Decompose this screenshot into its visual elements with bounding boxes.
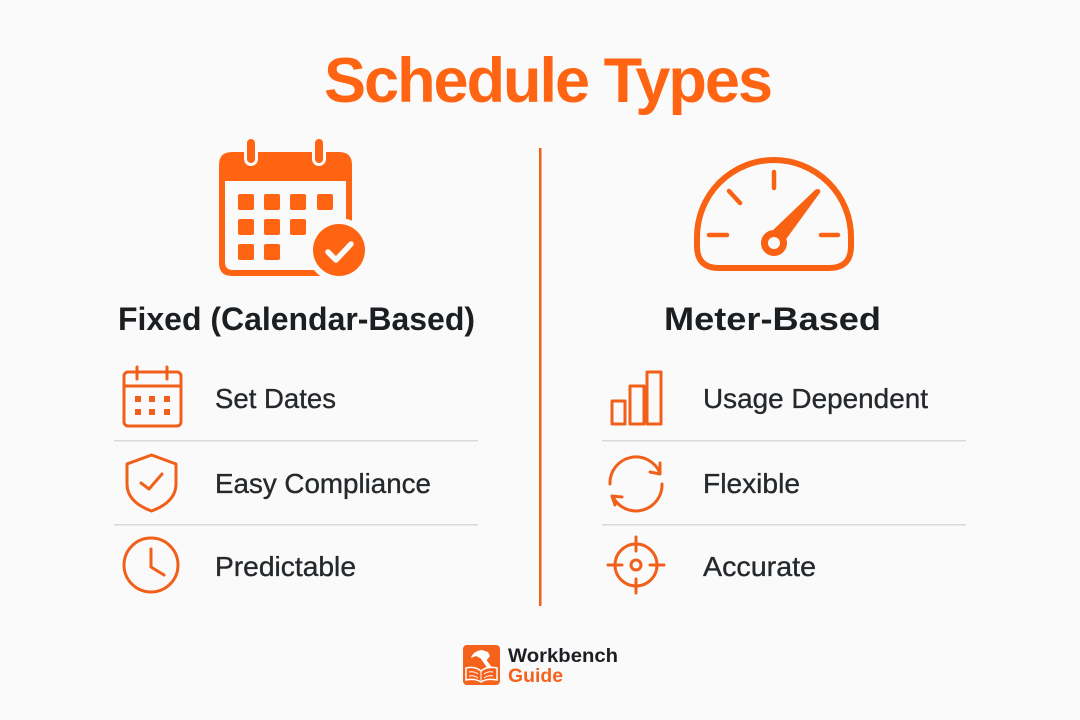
icon: hammer and book — [463, 645, 500, 685]
title: Schedule Types — [324, 46, 773, 116]
list item: easy compliance — [127, 455, 431, 511]
label: accurate: Accurate — [703, 551, 816, 582]
wordmark: workbench: Workbench — [508, 646, 618, 667]
wordmark: guide: Guide — [508, 666, 563, 687]
icon: large calendar with check — [219, 136, 371, 282]
list item: flexible — [610, 457, 800, 511]
icon: small calendar — [124, 367, 181, 426]
center divider — [539, 148, 542, 606]
heading: meter-based: Meter-Based — [664, 301, 881, 337]
label: set dates: Set Dates — [215, 383, 336, 414]
panel: fixed calendar-based — [118, 136, 475, 592]
list item: set dates — [124, 367, 336, 426]
icon: bars — [612, 372, 661, 424]
icon: refresh arrows — [610, 457, 662, 511]
panel: meter-based — [608, 160, 928, 593]
icon: shield check — [127, 455, 176, 511]
label: flexible: Flexible — [703, 468, 800, 499]
icon: clock — [124, 538, 178, 592]
heading: fixed: Fixed (Calendar-Based) — [118, 301, 475, 337]
list item: predictable — [124, 538, 356, 592]
icon: target — [608, 537, 664, 593]
list item: usage dependent — [612, 372, 928, 424]
label: predictable: Predictable — [215, 551, 356, 582]
icon: gauge — [697, 160, 851, 268]
list item: accurate — [608, 537, 816, 593]
label: usage dependent: Usage Dependent — [703, 383, 928, 414]
label: easy compliance: Easy Compliance — [215, 468, 431, 499]
logo: workbench guide — [463, 645, 618, 687]
